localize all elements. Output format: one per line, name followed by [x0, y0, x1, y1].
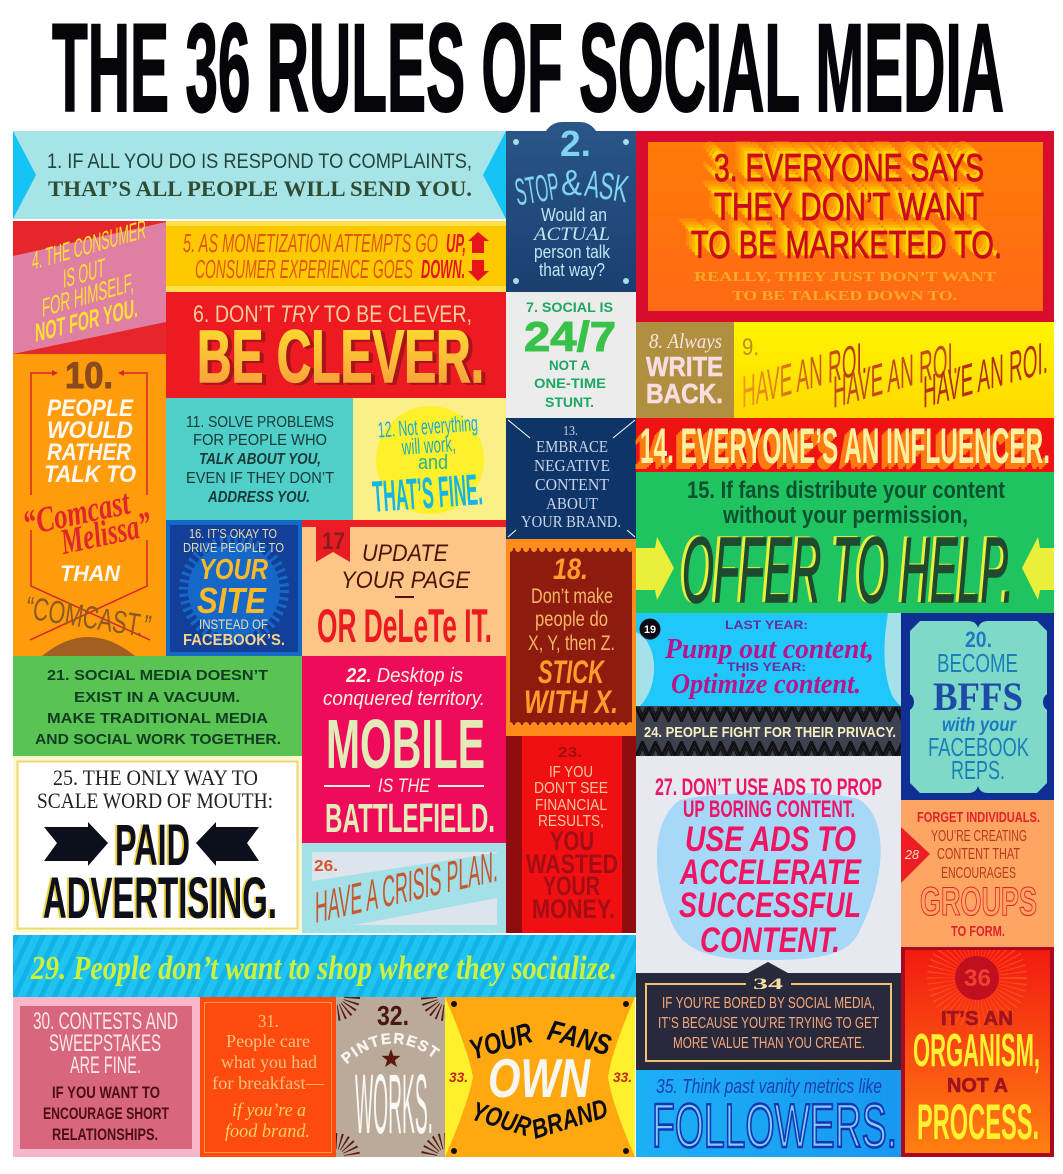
- panel: rule 36: IT’S AN: [941, 1008, 1013, 1030]
- panel: rule 1: 1. IF ALL YOU DO IS RESPOND TO COMPLAINTS,: [47, 150, 472, 173]
- panel: rule 34: 34: [753, 976, 783, 993]
- panel: rule 5: 5. AS MONETIZATION ATTEMPTS GO: [183, 228, 438, 258]
- panel: rule 27: 27. DON’T USE ADS TO PROP: [655, 774, 882, 801]
- panel: rule 28: ENCOURAGES: [941, 865, 1016, 882]
- panel: rule 31: [200, 997, 336, 1157]
- panel: rule 19: THIS YEAR:: [727, 660, 806, 674]
- panel: rule 18: people do: [535, 608, 608, 631]
- panel: rule 12: [353, 398, 506, 522]
- panel: rule 34: IF YOU’RE BORED BY SOCIAL MEDIA,: [662, 995, 875, 1012]
- panel: rule 2: person talk: [534, 242, 611, 262]
- panel: rule 13: YOUR BRAND.: [521, 512, 621, 531]
- panel: rule 28: CONTENT THAT: [937, 846, 1020, 863]
- panel: rule 4: NOT FOR YOU.: [35, 293, 138, 348]
- panel: rule 25: 25. THE ONLY WAY TO: [53, 765, 258, 790]
- panel: rule 20: REPS.: [951, 755, 1005, 785]
- panel: rule 5: UP,: [446, 228, 466, 258]
- panel: rule 13: CONTENT: [535, 475, 610, 494]
- panel: rule 32: 32.: [377, 1000, 409, 1031]
- panel: rule 33: BRAND: [528, 1093, 611, 1145]
- panel: rule 6: [166, 292, 506, 398]
- panel: rule 10: [13, 354, 166, 656]
- panel: rule 34: IT’S BECAUSE YOU’RE TRYING TO GET: [658, 1015, 879, 1032]
- panel: rule 30: ENCOURAGE SHORT: [43, 1104, 169, 1123]
- panel: rule 4: FOR HIMSELF,: [42, 267, 134, 323]
- panel: rule 7: NOT A: [549, 357, 590, 373]
- panel: rule 31: for breakfast—: [212, 1073, 325, 1093]
- panel: rule 12: and: [418, 452, 448, 474]
- panel: rule 6: BE CLEVER.: [197, 315, 484, 398]
- panel: rule 13: [506, 418, 636, 539]
- panel: rule 11: FOR PEOPLE WHO: [193, 432, 327, 449]
- panel: rule 23: IF YOU: [549, 764, 593, 781]
- panel: rule 21: EXIST IN A VACUUM.: [74, 689, 240, 706]
- panel: rule 3: [636, 131, 1054, 322]
- panel: rule 6: 6. DON’T TRY TO BE CLEVER,: [193, 301, 472, 328]
- panel: rule 10: RATHER: [47, 439, 132, 466]
- panel: rule 23: MONEY.: [532, 894, 615, 924]
- panel: rule 30: 30. CONTESTS AND: [33, 1008, 178, 1035]
- panel: rule 28: 28: [904, 847, 920, 862]
- panel: rule 22: 22. Desktop is: [345, 665, 463, 687]
- panel: rule 28: [901, 800, 1054, 947]
- panel: rule 20: BECOME: [937, 648, 1018, 678]
- panel: rule 33: YOUR: [466, 1017, 536, 1067]
- panel: rule 25: PAID: [115, 813, 190, 878]
- panel: rule 24: [636, 706, 901, 757]
- panel: rule 18: Don’t make: [531, 585, 613, 608]
- panel: rule 36: NOT A: [947, 1075, 1008, 1097]
- panel: rule 23: DON’T SEE: [534, 780, 608, 797]
- panel: rule 35: [636, 1070, 901, 1161]
- panel: rule 30: ARE FINE.: [70, 1052, 141, 1079]
- panel: rule 26: [302, 842, 506, 933]
- panel: rule 23: WASTED: [526, 849, 618, 879]
- panel: rule 25: SCALE WORD OF MOUTH:: [37, 788, 273, 813]
- panel: rule 22: conquered territory.: [323, 688, 485, 710]
- panel: rule 36: [901, 942, 1054, 1157]
- panel: rule 35: 35. Think past vanity metrics like: [656, 1076, 882, 1098]
- panel: rule 18: STICK: [538, 654, 606, 690]
- panel: rule 5: CONSUMER EXPERIENCE GOES: [195, 254, 413, 284]
- panel: rule 30: SWEEPSTAKES: [49, 1030, 161, 1057]
- panel: rule 9: [734, 322, 1054, 418]
- panel: rule 27: [636, 756, 901, 973]
- panel: rule 10: “Comcast: [19, 482, 134, 543]
- panel: rule 7: [506, 292, 636, 418]
- panel: rule 11: [166, 398, 353, 520]
- panel: rule 2: ACTUAL: [532, 224, 610, 245]
- panel: rule 31: People care: [226, 1031, 310, 1051]
- panel: rule 8: BACK.: [646, 378, 723, 409]
- panel: rule 34: MORE VALUE THAN YOU CREATE.: [673, 1035, 865, 1052]
- panel: rule 13: 13.: [563, 424, 578, 439]
- panel: rule 5: [166, 221, 506, 292]
- panel: rule 7: 24/7: [524, 313, 616, 360]
- panel: rule 7: STUNT.: [545, 394, 594, 410]
- panel: rule 30: [13, 997, 200, 1157]
- panel: rule 16: INSTEAD OF: [199, 616, 268, 632]
- panel: rule 23: 23.: [558, 744, 582, 761]
- panel: rule 30: RELATIONSHIPS.: [52, 1125, 158, 1144]
- panel: rule 33: YOUR: [468, 1096, 535, 1142]
- panel: rule 23: [506, 736, 636, 933]
- panel: rule 33: 33.: [449, 1069, 468, 1085]
- panel: rule 32: PINTEREST: [340, 1032, 440, 1064]
- panel: rule 19: 19: [644, 624, 656, 636]
- panel: rule 17: OR DeLeTe IT.: [317, 599, 492, 652]
- panel: rule 27: SUCCESSFUL: [679, 886, 861, 925]
- panel: rule 27: USE ADS TO: [685, 820, 856, 859]
- panel: rule 15: [636, 472, 1054, 622]
- panel: rule 4: 4. THE CONSUMER: [32, 214, 146, 276]
- panel: rule 20: BFFS: [933, 674, 1023, 719]
- panel: rule 10: WOULD: [47, 417, 133, 444]
- panel: rule 20: with your: [942, 715, 1017, 736]
- panel: rule 11: TALK ABOUT YOU,: [199, 451, 321, 468]
- text: HAVE A CRISIS PLAN.: [315, 842, 498, 933]
- panel: rule 18: X, Y, then Z.: [528, 632, 615, 655]
- panel: rule 10: 10.: [65, 355, 113, 396]
- panel: rule 23: RESULTS,: [538, 813, 604, 830]
- panel: rule 12: 12. Not everything: [377, 411, 479, 442]
- panel: rule 33: [445, 997, 635, 1157]
- panel: rule 17: UPDATE: [362, 540, 449, 567]
- panel: rule 16: 16. IT’S OKAY TO: [189, 527, 277, 541]
- panel: rule 10: TALK TO: [44, 461, 136, 488]
- panel: rule 2: [506, 122, 636, 292]
- panel: rule 17: [302, 520, 506, 656]
- panel: rule 8: [636, 322, 734, 418]
- panel: rule 29: 29. People don’t want to shop where they socialize.: [30, 950, 617, 987]
- panel: rule 3: THEY DON’T WANT: [714, 186, 984, 229]
- panel: rule 25: [13, 756, 302, 933]
- panel: rule 13: NEGATIVE: [534, 456, 610, 475]
- panel: rule 16: YOUR: [199, 554, 268, 586]
- panel: rule 11: 11. SOLVE PROBLEMS: [186, 414, 334, 431]
- panel: rule 8: 8. Always: [649, 329, 722, 353]
- panel: rule 3: REALLY, THEY JUST DON’T WANT: [694, 270, 997, 285]
- panel: rule 31: 31.: [258, 1011, 279, 1031]
- panel: rule 2: that way?: [539, 260, 605, 280]
- panel: rule 21: MAKE TRADITIONAL MEDIA: [47, 710, 268, 727]
- panel: rule 18: WITH X.: [524, 684, 618, 720]
- panel: rule 13: ABOUT: [546, 494, 599, 513]
- panel: rule 15: without your permission,: [722, 502, 968, 529]
- panel: rule 23: FINANCIAL: [535, 797, 607, 814]
- panel: rule 26: 26.: [314, 858, 338, 875]
- panel: rule 8: WRITE: [646, 351, 723, 382]
- panel: rule 7: 7. SOCIAL IS: [526, 299, 613, 315]
- panel: rule 21: AND SOCIAL WORK TOGETHER.: [35, 731, 281, 748]
- panel: rule 11: ADDRESS YOU.: [207, 489, 310, 506]
- panel: rule 34: [636, 962, 901, 1070]
- panel: rule 2: STOP: [512, 166, 562, 214]
- panel: rule 27: ACCELERATE: [679, 853, 862, 892]
- panel: rule 9: 9.: [742, 334, 759, 361]
- panel: rule 27: UP BORING CONTENT.: [683, 796, 855, 823]
- panel: rule 31: what you had: [221, 1052, 317, 1072]
- panel: rule 11: EVEN IF THEY DON’T: [186, 470, 334, 487]
- panel: rule 33: 33.: [613, 1069, 632, 1085]
- panel: rule 27: CONTENT.: [700, 921, 840, 960]
- panel: rule 19: LAST YEAR:: [725, 618, 808, 632]
- panel: rule 23: YOUR: [543, 871, 600, 901]
- panel: rule 18: 18.: [553, 553, 588, 586]
- panel: rule 12: will work,: [400, 431, 456, 460]
- panel: rule 2: Would an: [541, 205, 607, 225]
- arrows: pointing at paid: [44, 822, 259, 866]
- panel: rule 17: YOUR PAGE: [341, 567, 471, 594]
- panel: rule 2: ASK: [582, 163, 631, 211]
- panel: rule 5: DOWN.: [421, 254, 465, 284]
- panel: rule 19: [636, 613, 901, 706]
- panel: rule 10: “COMCAST.”: [23, 589, 154, 645]
- panel: rule 18: [506, 539, 636, 736]
- panel: rule 13: EMBRACE: [536, 437, 608, 456]
- panel: rule 10: THAN: [60, 561, 121, 586]
- panel: rule 33: FANS: [544, 1015, 615, 1062]
- panel: rule 10: Melissa”: [56, 504, 155, 562]
- panel: rule 16: SITE: [197, 580, 267, 621]
- panel: rule 1: [13, 131, 506, 219]
- panel: rule 10: PEOPLE: [47, 395, 134, 422]
- panel: rule 1: THAT’S ALL PEOPLE WILL SEND YOU.: [48, 176, 472, 201]
- panel: rule 31: food brand.: [225, 1121, 310, 1142]
- panel: rule 33: OWN: [488, 1047, 591, 1109]
- panel: rule 21: 21. SOCIAL MEDIA DOESN’T: [47, 667, 268, 684]
- panel: rule 28: TO FORM.: [951, 923, 1005, 940]
- panel: rule 31: if you’re a: [232, 1100, 306, 1121]
- text: THAT’S FINE.: [371, 465, 484, 522]
- panel: rule 22: BATTLEFIELD.: [325, 795, 495, 841]
- panel: rule 15: 15. If fans distribute your content: [687, 477, 1005, 504]
- panel: rule 30: IF YOU WANT TO: [52, 1083, 160, 1102]
- panel: rule 16: [166, 520, 302, 656]
- panel: rule 21: [13, 656, 302, 756]
- panel: rule 24: 24. PEOPLE FIGHT FOR THEIR PRIVACY.: [644, 724, 896, 741]
- panel: rule 3: TO BE TALKED DOWN TO.: [732, 289, 957, 304]
- panel: rule 2: 2.: [560, 123, 591, 164]
- panel: rule 16: FACEBOOK’S.: [183, 632, 285, 649]
- panel: rule 29: [13, 935, 636, 997]
- panel: rule 22: IS THE: [378, 776, 430, 797]
- panel: rule 4: [13, 214, 166, 354]
- panel: rule 9: HAVE AN ROI.: [742, 331, 867, 418]
- panel: rule 17: 17: [322, 528, 345, 555]
- panel: rule 19: Pump out content,: [664, 633, 874, 665]
- panel: rule 23: YOU: [550, 826, 594, 856]
- panel: rule 35: FOLLOWERS.: [652, 1092, 897, 1161]
- panel: rule 2: &: [561, 162, 582, 203]
- panel: rule 22: [302, 656, 506, 843]
- panel: rule 22: MOBILE: [326, 705, 485, 783]
- panel: rule 32: [336, 997, 445, 1157]
- panel: rule 7: ONE-TIME: [534, 375, 606, 391]
- panel: rule 16: DRIVE PEOPLE TO: [183, 541, 284, 555]
- panel: rule 4: IS OUT: [63, 252, 105, 294]
- panel: rule 36: 36: [964, 965, 991, 992]
- panel: rule 20: 20.: [965, 627, 992, 652]
- panel: rule 20: [901, 613, 1054, 800]
- panel: rule 19: Optimize content.: [671, 668, 861, 700]
- panel: rule 25: ADVERTISING.: [43, 866, 277, 931]
- text: WORKS.: [355, 1057, 433, 1151]
